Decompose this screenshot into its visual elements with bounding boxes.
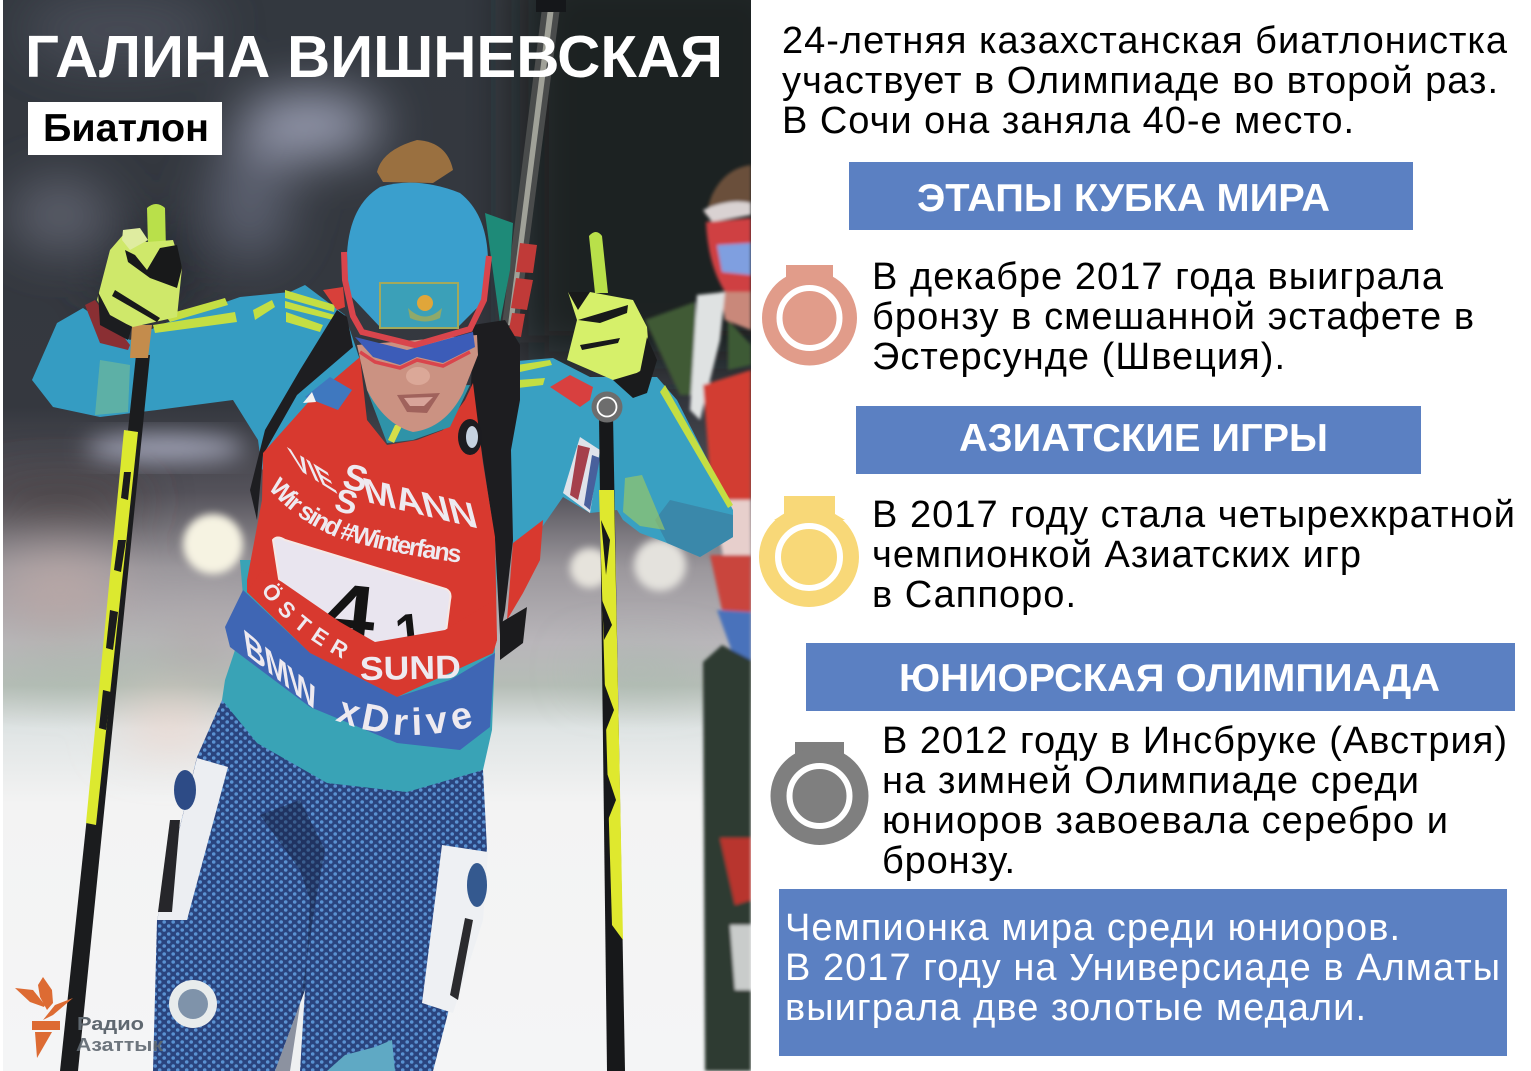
callout: junior world champion: В 2017 году на Универсиаде в Алматы: [785, 947, 1500, 989]
callout: junior world champion: Чемпионка мира среди юниоров.: [785, 907, 1400, 949]
text: asian games: чемпионкой Азиатских игр: [872, 534, 1361, 576]
cap: [347, 183, 488, 328]
callout: junior world champion: [779, 889, 1507, 1056]
text: youth olympics: бронзу.: [882, 840, 1015, 882]
face: [357, 335, 478, 432]
race bib: [225, 357, 497, 750]
icon: bronze medal: [762, 265, 857, 366]
text: youth olympics: на зимней Олимпиаде среди: [882, 760, 1419, 802]
icon: silver medal: [770, 742, 868, 845]
logo: Radio Azattyk: Радио: [77, 1014, 144, 1034]
harness straps: [250, 310, 520, 635]
right ski pole: [589, 232, 625, 1071]
race bib: BMW: [241, 621, 320, 722]
heading: youth olympics: [806, 643, 1515, 711]
right glove: [567, 292, 657, 398]
race bib: S: [339, 455, 372, 501]
logo: Radio Azattyk: Азаттык: [76, 1035, 164, 1055]
panel: athlete photo: [3, 0, 751, 1071]
goggles: [355, 332, 475, 365]
race bib: 4: [319, 565, 380, 658]
text: youth olympics: [882, 720, 1507, 882]
name title: ГАЛИНА ВИШНЕВСКАЯ: [25, 24, 723, 90]
text: world cup: Эстерсунде (Швеция).: [872, 336, 1285, 378]
intro text: [782, 20, 1508, 142]
text: asian games: в Саппоро.: [872, 574, 1076, 616]
logo: Radio Azattyk: [15, 977, 164, 1058]
left ski pole: [60, 204, 166, 1071]
sport label: Биатлон: [43, 107, 209, 150]
red panel under arm: [500, 520, 543, 660]
race bib: MANN: [359, 470, 482, 536]
text: world cup: [872, 256, 1474, 378]
intro text: В Сочи она заняла 40-е место.: [782, 100, 1354, 142]
icon: gold medal: [759, 496, 859, 607]
heading: youth olympics: ЮНИОРСКАЯ ОЛИМПИАДА: [899, 657, 1440, 700]
intro text: участвует в Олимпиаде во второй раз.: [782, 60, 1498, 102]
tights: [153, 700, 488, 1071]
text: world cup: бронзу в смешанной эстафете в: [872, 296, 1474, 338]
heading: asian games: [856, 406, 1421, 474]
head: [344, 140, 489, 443]
race bib: ÖSTER: [264, 583, 348, 659]
text: asian games: В 2017 году стала четырехкратной: [872, 494, 1515, 536]
callout: junior world champion: выиграла две золотые медали.: [785, 987, 1366, 1029]
hair: [377, 140, 453, 183]
race bib: VIE: [284, 441, 342, 502]
heading: asian games: АЗИАТСКИЕ ИГРЫ: [959, 417, 1328, 460]
race bib: Wir sind #Winterfans: [270, 476, 460, 562]
heading: world cup: [849, 162, 1413, 230]
text: youth olympics: В 2012 году в Инсбруке (Австрия): [882, 720, 1507, 762]
left glove: [97, 228, 182, 340]
race bib: 1: [392, 602, 426, 661]
text: world cup: В декабре 2017 года выиграла: [872, 256, 1444, 298]
text: youth olympics: юниоров завоевала серебро и: [882, 800, 1448, 842]
second athlete in background: [645, 165, 751, 1071]
blurred background lights: [0, 0, 800, 745]
race bib: xDrive: [335, 702, 472, 735]
rifle: [485, 0, 566, 337]
intro text: 24-летняя казахстанская биатлонистка: [782, 20, 1508, 62]
sport label: [28, 102, 222, 155]
neck: [367, 385, 470, 443]
heading: world cup: ЭТАПЫ КУБКА МИРА: [917, 177, 1330, 220]
race bib: S: [331, 481, 362, 522]
race bib: SUND: [359, 648, 461, 687]
torso and sleeves: [32, 285, 733, 792]
text: asian games: [872, 494, 1515, 616]
